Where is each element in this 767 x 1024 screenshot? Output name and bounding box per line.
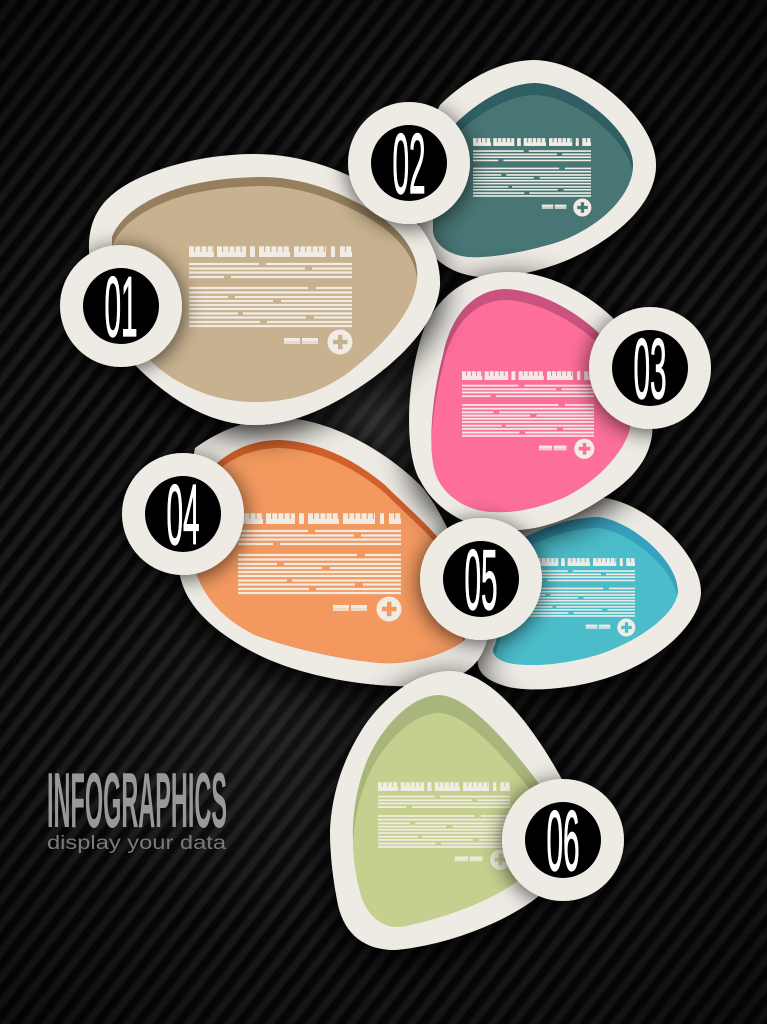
- panel 02: teal blob: [410, 60, 656, 277]
- number badge 03: 03: [633, 322, 667, 417]
- number badge 05: [420, 518, 542, 640]
- panel 04: orange blob: [177, 418, 487, 686]
- number badge 05: 05: [464, 533, 498, 628]
- number badge 01: 01: [104, 260, 138, 355]
- number badge 06: [502, 779, 624, 901]
- number badge 03: [589, 307, 711, 429]
- text: INFOGRAPHICS: [47, 756, 227, 844]
- number badge 06: 06: [546, 794, 580, 889]
- panel 05: light blue blob: [478, 498, 701, 689]
- panel 01: tan blob: [89, 154, 440, 425]
- number badge 04: [122, 453, 244, 575]
- number badge 04: 04: [166, 468, 200, 563]
- number badge 01: [60, 245, 182, 367]
- subtitle: display your data: display your data: [47, 833, 227, 854]
- panel 03: pink blob: [409, 272, 652, 530]
- number badge 02: 02: [392, 117, 426, 212]
- panel 06: green blob: [330, 671, 565, 950]
- number badge 02: [348, 102, 470, 224]
